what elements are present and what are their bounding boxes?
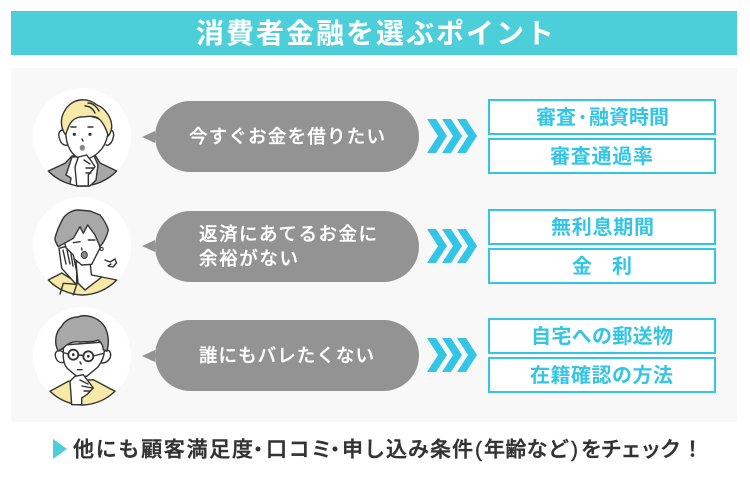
box: at-home mail delivery bbox=[489, 319, 715, 353]
title banner: 消費者金融を選ぶポイント bbox=[196, 18, 554, 49]
row 3: does not want to be found out bbox=[33, 307, 715, 405]
box: employment verification method: 在籍確認の方法 bbox=[530, 364, 673, 387]
box: interest rate: 金 利 bbox=[572, 255, 632, 278]
speech bubble bbox=[155, 320, 419, 391]
box: approval rate: 審査通過率 bbox=[550, 145, 653, 168]
box: interest-free period bbox=[489, 210, 715, 244]
box: review and financing time bbox=[489, 100, 715, 134]
speech bubble: 余裕がない bbox=[199, 248, 298, 269]
box: review and financing time: 審査 bbox=[536, 106, 576, 129]
box: employment verification method bbox=[489, 358, 715, 392]
icon: woman with hand on cheek bbox=[33, 197, 131, 295]
title banner bbox=[11, 11, 737, 55]
icon: man with glasses thinking bbox=[33, 307, 131, 405]
footer note bbox=[53, 438, 703, 462]
panel: three consumer concerns bbox=[11, 68, 737, 422]
box: interest rate bbox=[489, 249, 715, 283]
footer note: ) bbox=[571, 438, 578, 462]
footer note: ( bbox=[475, 438, 482, 462]
box: approval rate bbox=[489, 139, 715, 173]
arrow: speech pointer bbox=[142, 240, 155, 252]
arrow: chevrons bbox=[427, 229, 477, 263]
footer note: 口コミ bbox=[266, 438, 332, 462]
speech bubble bbox=[155, 101, 419, 172]
box: at-home mail delivery: 自宅への郵送物 bbox=[531, 325, 673, 348]
footer note: 年齢など bbox=[484, 438, 569, 462]
footer note: をチェック bbox=[581, 438, 681, 462]
row 1: wants money right away bbox=[33, 88, 715, 186]
footer note: ！ bbox=[682, 438, 703, 462]
row 2: money for repayment bbox=[33, 197, 715, 295]
footer note: 他にも顧客満足度 bbox=[73, 438, 253, 462]
box: review and financing time: 融資時間 bbox=[589, 106, 669, 129]
arrow: chevrons bbox=[427, 119, 477, 153]
icon: footer triangle bbox=[53, 439, 67, 459]
speech bubble: 今すぐお金を借りたい bbox=[189, 126, 385, 147]
arrow: chevrons bbox=[427, 338, 477, 372]
speech bubble bbox=[155, 211, 419, 282]
box: interest-free period: 無利息期間 bbox=[551, 215, 654, 239]
footer note: 申し込み条件 bbox=[342, 438, 473, 462]
speech bubble: 返済にあてるお金に bbox=[199, 224, 377, 244]
icon: blond man thinking bbox=[33, 88, 131, 186]
arrow: speech pointer bbox=[142, 131, 155, 143]
arrow: speech pointer bbox=[142, 350, 155, 362]
speech bubble: 誰にもバレたくない bbox=[199, 345, 374, 366]
